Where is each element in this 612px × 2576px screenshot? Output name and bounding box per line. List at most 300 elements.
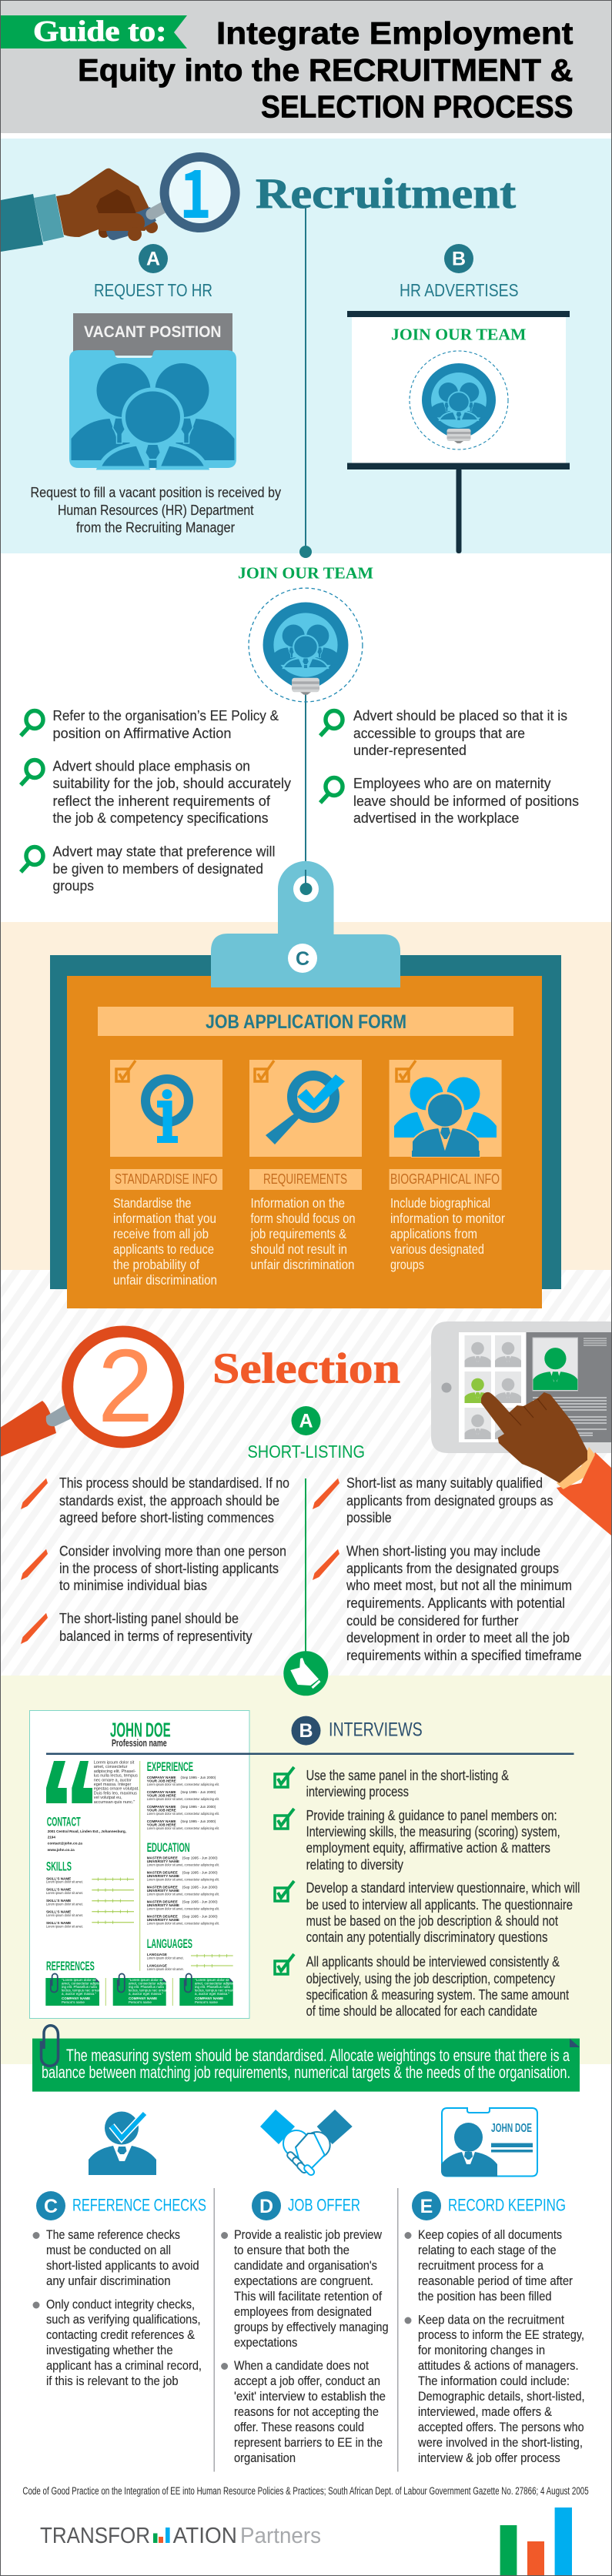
icon: magnifier xyxy=(21,760,43,785)
resume quote: Duis felis leo, maximus xyxy=(94,1791,137,1796)
text block: if this is relevant to the job xyxy=(46,2374,179,2388)
resume education: MASTER DEGREE (Sep 1995 - Jun 2000) xyxy=(147,1885,218,1889)
card: requirements xyxy=(249,1060,362,1272)
resume experience: Lorem ipsum dolor sit amet, consectetur adipiscing elit. xyxy=(147,1826,219,1830)
icon: pencil xyxy=(313,1549,339,1580)
logo: transformation partners: TRANSFOR xyxy=(40,2524,150,2548)
icon: bulb xyxy=(249,588,363,702)
resume experience: Lorem ipsum dolor sit amet, consectetur adipiscing elit. xyxy=(147,1812,219,1816)
text block: the position has been filled xyxy=(418,2290,551,2304)
bullet group: right: leave should be informed of positions xyxy=(353,793,579,809)
resume languages: LANGUAGE xyxy=(147,1963,167,1967)
icon: pencil xyxy=(21,1613,48,1644)
text block xyxy=(32,2228,202,2388)
resume experience: YOUR JOB HERE xyxy=(147,1793,176,1798)
resume references: lectus, tempus nec ornare xyxy=(62,1989,102,1992)
resume experience: Lorem ipsum dolor sit amet, consectetur adipiscing elit. xyxy=(147,1782,219,1786)
resume education: MASTER DEGREE (Sep 1995 - Jun 2000) xyxy=(147,1899,218,1903)
title xyxy=(78,15,574,125)
text block: applicant has a criminal record, xyxy=(46,2359,202,2373)
resume languages: LANGUAGES xyxy=(147,1936,192,1951)
bullet group: left: the job & competency specifications xyxy=(52,810,268,826)
icon: handshake xyxy=(260,2110,353,2177)
text block: offer. These reasons could xyxy=(234,2421,364,2434)
icon: clipboard clip: C xyxy=(296,948,309,970)
text block: The same reference checks xyxy=(46,2228,180,2242)
icon: checkbox xyxy=(396,1061,416,1081)
text block: expectations are congruent. xyxy=(234,2274,373,2288)
heading: reference checks: REFERENCE CHECKS xyxy=(72,2195,206,2214)
checklist xyxy=(275,1767,580,2019)
text: request description: from the Recruiting Manager xyxy=(76,519,235,536)
text block: unfair discrimination xyxy=(113,1272,217,1288)
text block: accepted offers. The persons who xyxy=(418,2421,584,2434)
panel: header xyxy=(0,0,612,133)
resume education: Lorem ipsum dolor sit amet, consectetur adipiscing elit. xyxy=(147,1921,219,1925)
resume skills: SKILLS xyxy=(46,1859,72,1874)
resume references: "Lorem ipsum dolor sit xyxy=(195,1978,229,1982)
resume education: UNIVERSITY NAME xyxy=(147,1859,179,1863)
resume references: Person's name xyxy=(129,2000,152,2004)
icon: info xyxy=(145,1079,189,1143)
resume skills: Lorem ipsum dolor sit amet. xyxy=(46,1913,83,1917)
connector line xyxy=(305,1478,306,1655)
badge A: A xyxy=(299,1410,313,1432)
resume skills: Lorem ipsum dolor sit amet. xyxy=(46,1891,83,1895)
resume experience: COMPANY NAME (Sep 1995 - Jun 2000) xyxy=(147,1790,216,1794)
icon: people xyxy=(394,1078,497,1157)
resume experience: COMPANY NAME (Sep 1995 - Jun 2000) xyxy=(147,1819,216,1823)
resume skills: Lorem ipsum dolor sit amet. xyxy=(46,1924,83,1928)
icon: magnifier number 2 xyxy=(0,1328,179,1457)
text block: When a candidate does not xyxy=(234,2359,369,2373)
bullet group: left: reflect the inherent requirements of xyxy=(52,793,271,809)
icon: magnifier xyxy=(21,711,43,736)
heading: record keeping: RECORD KEEPING xyxy=(448,2195,566,2214)
bullet group: right: accessible to groups that are xyxy=(353,725,525,741)
resume contact: 2194 xyxy=(48,1835,55,1839)
icon: clipboard clip xyxy=(211,861,400,987)
text block: receive from all job xyxy=(113,1226,209,1241)
resume skills: Lorem ipsum dolor sit amet. xyxy=(46,1880,83,1884)
text block: process to inform the EE strategy, xyxy=(418,2328,584,2342)
ribbon: guide to xyxy=(0,15,187,48)
text block xyxy=(250,1195,356,1272)
resume quote: lus nulla lectus, tempus xyxy=(94,1774,138,1779)
resume languages xyxy=(147,1936,233,1971)
bullet group: right: requirements within a specified timeframe xyxy=(346,1647,582,1663)
icon: magnifier with check xyxy=(266,1074,345,1144)
resume skills: SKILL'S NAME xyxy=(46,1888,71,1892)
checklist: interviewing process xyxy=(306,1783,409,1799)
resume quote: Lorem ipsum dolor sit xyxy=(94,1761,135,1766)
resume skills: SKILL'S NAME xyxy=(46,1910,71,1913)
text block: Provide a realistic job preview xyxy=(234,2228,382,2242)
resume references: COMPANY NAME xyxy=(62,1996,90,2000)
resume education: Lorem ipsum dolor sit amet, consectetur adipiscing elit. xyxy=(147,1892,219,1896)
resume references: COMPANY NAME xyxy=(129,1996,157,2000)
text block: reasonable period of time after xyxy=(418,2274,574,2288)
resume languages: Lorem ipsum dolor sit amet. xyxy=(147,1956,184,1960)
text block: reasons for not accepting the xyxy=(234,2405,379,2419)
icon: tick xyxy=(275,1767,294,1787)
text: request description: Human Resources (HR) Department xyxy=(58,502,254,518)
text block: information to monitor xyxy=(390,1211,505,1226)
icon: tablet and pointing hand xyxy=(431,1321,612,1535)
heading: join our team: JOIN OUR TEAM xyxy=(238,564,373,583)
resume references: COMPANY NAME xyxy=(195,1996,223,2000)
text block: form should focus on xyxy=(251,1211,356,1226)
resume contact: CONTACT xyxy=(47,1815,81,1829)
resume quote xyxy=(46,1761,139,1805)
bullet group: right: Short-list as many suitably qualified xyxy=(346,1475,543,1491)
bullet group: left: standards exist, the approach should be xyxy=(59,1492,279,1509)
badge A: A xyxy=(146,248,160,269)
icon: tick xyxy=(275,1809,294,1829)
panel: interviews xyxy=(0,1651,612,2092)
resume contact: www.john.co.za xyxy=(47,1848,75,1852)
resume education: UNIVERSITY NAME xyxy=(147,1889,179,1893)
heading: selection: Selection xyxy=(212,1345,400,1393)
resume contact: 2001 Central Road, Linden Ext., Johannesburg, xyxy=(48,1829,126,1833)
text block: for monitoring changes in xyxy=(418,2344,545,2357)
resume name: JOHN DOE xyxy=(110,1719,171,1742)
title: Equity into the RECRUITMENT & xyxy=(78,52,573,88)
badge D xyxy=(252,2191,281,2220)
icon: person with tick xyxy=(89,2112,156,2175)
resume quote: egestas ornare volutpat. xyxy=(94,1787,139,1792)
text block: Information on the xyxy=(251,1195,345,1211)
bullet group: right xyxy=(320,707,579,826)
icon: pencil xyxy=(21,1549,48,1580)
resume experience xyxy=(147,1759,219,1830)
icon: vacant position folder: VACANT POSITION xyxy=(84,323,222,341)
text block: the probability of xyxy=(113,1257,199,1272)
resume experience: COMPANY NAME (Sep 1995 - Jun 2000) xyxy=(147,1776,216,1779)
text block: employees from designated xyxy=(234,2305,372,2319)
icon: tick xyxy=(275,1954,294,1974)
resume experience: Lorem ipsum dolor sit amet, consectetur adipiscing elit. xyxy=(147,1797,219,1801)
resume education: UNIVERSITY NAME xyxy=(147,1918,179,1922)
resume education: Lorem ipsum dolor sit amet, consectetur adipiscing elit. xyxy=(147,1877,219,1881)
badge A xyxy=(139,244,168,273)
bullet group: right: requirements. Applicants with potential xyxy=(346,1595,565,1611)
bullet group: right: under-represented xyxy=(353,742,467,758)
resume references: amet, consectetur adipisc- xyxy=(129,1981,169,1986)
text block: The information could include: xyxy=(418,2374,570,2388)
text block: information that you xyxy=(113,1211,216,1226)
card: biographical info xyxy=(390,1060,505,1272)
resume references: ing elit. Phasellus nulla xyxy=(195,1985,230,1989)
resume skills: SKILL'S NAME xyxy=(46,1876,71,1880)
text block: must be conducted on all xyxy=(46,2244,171,2257)
icon: corner bars xyxy=(500,2508,572,2575)
logo: transformation partners: ATION xyxy=(173,2524,237,2548)
text block: applicants to reduce xyxy=(113,1241,214,1257)
badge B: B xyxy=(299,1720,313,1742)
resume references: lectus, tempus nec ornare xyxy=(129,1989,169,1992)
bullet group: left: to minimise individual bias xyxy=(59,1577,207,1593)
bullet group: right: Advert should be placed so that it is xyxy=(353,707,567,723)
column divider xyxy=(214,2188,215,2472)
checklist: relating to diversity xyxy=(306,1856,404,1873)
text block: Demographic details, short-listed, xyxy=(418,2390,585,2404)
icon: id card xyxy=(441,2108,537,2177)
badge E: E xyxy=(420,2196,433,2217)
logo: transformation partners: Partners xyxy=(240,2524,321,2548)
text block: should not result in xyxy=(251,1241,347,1257)
icon: paper clip xyxy=(42,2026,59,2066)
text block: groups xyxy=(390,1257,424,1272)
title: Integrate Employment xyxy=(216,15,574,51)
resume quote: vel volutpat eu, xyxy=(94,1796,122,1800)
resume quote: accumsan quis nunc." xyxy=(94,1800,135,1805)
resume references: amet, consectetur adipisc- xyxy=(195,1981,236,1986)
bullet group: left xyxy=(21,1475,289,1644)
bullet group: right: development in order to meet all the job xyxy=(346,1629,570,1645)
icon: magnifier xyxy=(320,777,343,803)
badge B xyxy=(291,1716,320,1746)
icon: advert board xyxy=(347,311,570,553)
resume education: MASTER DEGREE (Sep 1995 - Jun 2000) xyxy=(147,1914,218,1918)
logo: transformation partners xyxy=(40,2524,321,2548)
card: standardise info: STANDARDISE INFO xyxy=(115,1171,217,1187)
ribbon: guide to: Guide to: xyxy=(33,15,167,48)
bullet group: left: be given to members of designated xyxy=(52,860,263,877)
text block: Include biographical xyxy=(390,1195,490,1211)
resume education: MASTER DEGREE (Sep 1995 - Jun 2000) xyxy=(147,1856,218,1859)
text block: Keep copies of all documents xyxy=(418,2228,562,2242)
resume references: lectus, tempus nec ornare xyxy=(195,1989,235,1992)
text: request description: Request to fill a vacant position is received by xyxy=(31,484,282,500)
text: request description xyxy=(31,484,282,536)
resume references: ing elit. Phasellus nulla xyxy=(62,1985,97,1989)
text block: investigating whether the xyxy=(46,2344,173,2357)
text block xyxy=(390,1195,505,1272)
icon: id card: JOHN DOE xyxy=(491,2122,532,2135)
text block: groups by effectively managing xyxy=(234,2320,389,2334)
bullet group: right: applicants from the designated groups xyxy=(346,1560,559,1576)
checklist: of time should be allocated for each candidate xyxy=(306,2003,537,2019)
text block: job requirements & xyxy=(250,1226,346,1241)
resume name xyxy=(110,1719,171,1749)
icon: tick xyxy=(275,1881,294,1901)
badge C xyxy=(36,2191,65,2220)
resume skills: SKILL'S NAME xyxy=(46,1921,71,1925)
bullet group: left: position on Affirmative Action xyxy=(52,725,231,741)
bullet group: left: Consider involving more than one person xyxy=(59,1543,286,1559)
resume education: MASTER DEGREE (Sep 1995 - Jun 2000) xyxy=(147,1870,218,1874)
checklist: Use the same panel in the short-listing & xyxy=(306,1767,510,1783)
resume education: Lorem ipsum dolor sit amet, consectetur adipiscing elit. xyxy=(147,1863,219,1866)
badge B xyxy=(444,244,473,273)
icon: magnifier xyxy=(320,711,343,736)
bullet group: left: suitability for the job, should accurately xyxy=(52,775,292,791)
heading: job application form: JOB APPLICATION FORM xyxy=(206,1011,406,1033)
text block: attitudes & actions of managers. xyxy=(418,2359,579,2373)
resume quote: adipiscing elit. Phasel- xyxy=(94,1769,136,1774)
bullet group: left: This process should be standardised. If no xyxy=(59,1475,289,1491)
checklist: employment equity, affirmative action & matters xyxy=(306,1839,550,1856)
rule under interviews heading xyxy=(46,1753,574,1755)
resume education: Lorem ipsum dolor sit amet, consectetur adipiscing elit. xyxy=(147,1906,219,1910)
text block xyxy=(405,2228,585,2465)
text block: to ensure that both the xyxy=(234,2244,349,2257)
checklist: objectively, using the job description, competency xyxy=(306,1970,556,1986)
panel: selection xyxy=(0,1321,612,1663)
bullet group: right: could be considered for further xyxy=(346,1612,518,1629)
text block: various designated xyxy=(390,1241,484,1257)
icon: magnifier number 1 xyxy=(165,141,236,237)
resume references: ing elit. Phasellus nulla xyxy=(129,1985,164,1989)
text block: unfair discrimination xyxy=(251,1257,354,1272)
panel: job application form clipboard xyxy=(50,861,561,1308)
heading: short-listing: SHORT-LISTING xyxy=(248,1442,365,1462)
panel: reference checks xyxy=(32,2112,206,2388)
resume references: a, auctor eget massa." xyxy=(195,1992,229,1996)
resume references: a, auctor eget massa." xyxy=(129,1992,163,1996)
resume references: amet, consectetur adipisc- xyxy=(62,1981,102,1986)
icon: pencil xyxy=(313,1478,339,1509)
icon: thumbs up xyxy=(283,1651,328,1696)
resume languages: LANGUAGE xyxy=(147,1953,167,1956)
heading: request to hr: REQUEST TO HR xyxy=(94,280,212,300)
badge A xyxy=(291,1406,320,1435)
text block: interviewed, made offers & xyxy=(418,2405,552,2419)
text block: relating to each stage of the xyxy=(418,2244,557,2257)
badge B: B xyxy=(452,248,466,269)
heading: recruitment: Recruitment xyxy=(256,170,516,218)
connector line xyxy=(305,208,306,551)
resume languages: Lorem ipsum dolor sit amet. xyxy=(147,1967,184,1971)
text block: expectations xyxy=(234,2336,297,2350)
icon: vacant position folder xyxy=(69,313,236,468)
resume references: "Lorem ipsum dolor sit xyxy=(62,1978,96,1982)
resume education xyxy=(147,1840,219,1925)
bullet group: right: possible xyxy=(346,1509,392,1525)
text block xyxy=(113,1195,217,1288)
icon: checkbox xyxy=(255,1061,274,1081)
card: biographical info: BIOGRAPHICAL INFO xyxy=(390,1171,500,1187)
panel: advert guidance xyxy=(21,564,579,894)
callout: measuring system xyxy=(32,2026,580,2092)
resume references xyxy=(45,1959,236,2006)
heading: hr advertises: HR ADVERTISES xyxy=(400,280,519,300)
resume education: UNIVERSITY NAME xyxy=(147,1874,179,1878)
icon: pencil xyxy=(21,1478,48,1509)
resume experience: YOUR JOB HERE xyxy=(147,1823,176,1827)
text block: short-listed applicants to avoid xyxy=(46,2259,199,2273)
resume references: Person's name xyxy=(62,2000,85,2004)
bullet group: left: balanced in terms of representivity xyxy=(59,1628,252,1644)
heading: job offer: JOB OFFER xyxy=(288,2195,360,2214)
bullet group: left: Advert should place emphasis on xyxy=(52,758,250,774)
bullet group: left: The short-listing panel should be xyxy=(59,1610,239,1626)
text block: interview & job offer process xyxy=(418,2451,560,2465)
resume skills xyxy=(46,1859,134,1928)
resume quote: nec ornare a, auctor xyxy=(94,1778,132,1782)
badge E xyxy=(412,2191,441,2220)
resume contact xyxy=(47,1815,126,1852)
text block: candidate and organisation's xyxy=(234,2259,377,2273)
resume references: "Lorem ipsum dolor sit xyxy=(129,1978,163,1982)
resume experience: EXPERIENCE xyxy=(147,1759,193,1774)
heading: interviews: INTERVIEWS xyxy=(329,1719,423,1741)
heading: job application form xyxy=(98,1007,513,1036)
resume quote: eget massa. Integer xyxy=(94,1782,131,1787)
resume experience: YOUR JOB HERE xyxy=(147,1809,176,1812)
bullet group: right: who meet most, but not all the minimum xyxy=(346,1577,572,1593)
resume education: UNIVERSITY NAME xyxy=(147,1903,179,1907)
resume skills: Lorem ipsum dolor sit amet. xyxy=(46,1903,83,1906)
icon: magnifier number 2: 2 xyxy=(98,1328,153,1444)
resume skills: SKILL'S NAME xyxy=(46,1899,71,1903)
text block xyxy=(221,2228,389,2465)
text block: represent barriers to EE in the xyxy=(234,2436,383,2450)
text block: Standardise the xyxy=(113,1195,191,1211)
badge C: C xyxy=(44,2196,58,2217)
icon: checkbox xyxy=(116,1061,135,1081)
bullet group: left xyxy=(21,707,292,894)
panel: recruitment xyxy=(0,139,612,558)
resume contact: contact@john.co.za xyxy=(48,1842,82,1846)
text block: contacting credit references & xyxy=(46,2328,195,2342)
resume name: Profession name xyxy=(112,1737,167,1749)
resume references: Person's name xyxy=(195,2000,218,2004)
bullet group: right: advertised in the workplace xyxy=(353,810,519,826)
resume quote: amet, consectetur xyxy=(94,1765,128,1769)
card: standardise info xyxy=(110,1060,222,1288)
panel: record keeping xyxy=(405,2108,585,2465)
bullet group: left: in the process of short-listing applicants xyxy=(59,1560,279,1576)
section backgrounds: form and selection xyxy=(0,922,612,1676)
bullet group: left: groups xyxy=(52,877,94,894)
text block: recruitment process for a xyxy=(418,2259,543,2273)
text block: organisation xyxy=(234,2451,296,2465)
text block: This will facilitate retention of xyxy=(234,2290,382,2304)
icon: advert board: JOIN OUR TEAM xyxy=(391,326,527,344)
icon: magnifier number 1: 1 xyxy=(179,141,212,237)
text block: Keep data on the recruitment xyxy=(418,2314,564,2327)
text block: any unfair discrimination xyxy=(46,2274,171,2288)
text block: Only conduct integrity checks, xyxy=(46,2297,195,2311)
bullet group: left: agreed before short-listing commences xyxy=(59,1509,274,1525)
title: SELECTION PROCESS xyxy=(261,89,573,125)
bullet group: right: When short-listing you may include xyxy=(346,1543,540,1559)
icon: hand with magnifier xyxy=(1,169,166,252)
column divider xyxy=(397,2188,399,2472)
bullet group: right: applicants from designated groups as xyxy=(346,1492,553,1509)
connector dot xyxy=(299,546,312,558)
text block: applications from xyxy=(390,1226,477,1241)
resume experience: COMPANY NAME (Sep 1995 - Jun 2000) xyxy=(147,1805,216,1809)
icon: magnifier xyxy=(21,847,43,872)
resume references: a, auctor eget massa." xyxy=(62,1992,96,1996)
badge D: D xyxy=(259,2196,273,2217)
connector line xyxy=(305,693,306,870)
resume experience: YOUR JOB HERE xyxy=(147,1779,176,1782)
bullet group: left: Advert may state that preference will xyxy=(52,844,276,860)
bullet group: left: Refer to the organisation’s EE Policy & xyxy=(52,707,279,723)
text block: accept a job offer, conduct an xyxy=(234,2374,380,2388)
bullet group: right: Employees who are on maternity xyxy=(353,775,551,791)
resume references: REFERENCES xyxy=(46,1959,95,1973)
card: requirements: REQUIREMENTS xyxy=(263,1171,347,1187)
resume education: EDUCATION xyxy=(147,1840,190,1855)
bullet group: right xyxy=(313,1475,582,1663)
text block: such as verifying qualifications, xyxy=(46,2313,201,2327)
checklist: contain any potentially discriminatory questions xyxy=(306,1929,548,1945)
